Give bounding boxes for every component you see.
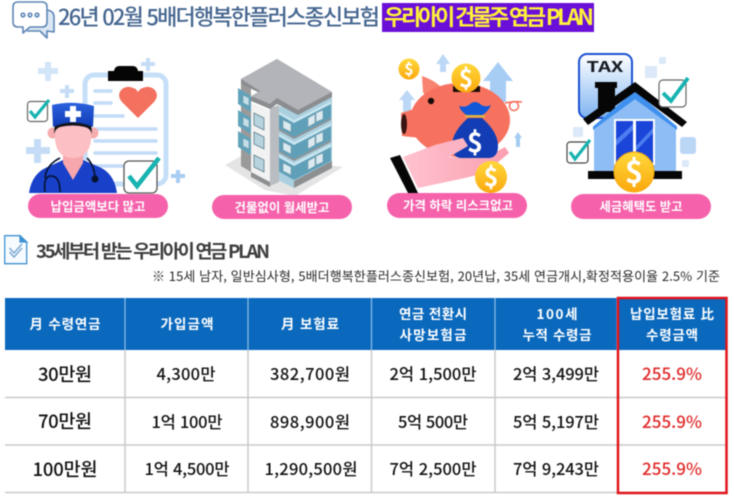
row: 100만원: 7억 2,500만 — [390, 456, 476, 480]
red highlight box — [618, 298, 726, 493]
title: 26년 02월 5배더행복한플러스종신보험 — [58, 0, 380, 32]
row: 100만원: 7억 9,243만 — [513, 456, 599, 480]
stair column — [251, 103, 279, 187]
icon: coins: $ — [459, 59, 473, 94]
row: 100만원: 1억 4,500만 — [144, 456, 230, 480]
row: 70만원: 898,900원 — [270, 409, 350, 433]
icon: decorative plus signs — [26, 58, 185, 183]
house body — [583, 82, 687, 179]
table header — [5, 298, 727, 350]
label pill: 세금혜택도 받고 — [571, 194, 711, 219]
row: 70만원 — [38, 408, 702, 434]
panel: building illustration — [225, 59, 343, 196]
decorative squares — [573, 57, 696, 167]
table header: 月 보험료 — [281, 313, 339, 333]
table header: 사망보험금 — [400, 324, 466, 344]
row: 30만원 — [38, 360, 702, 387]
row: 100만원: 1,290,500원 — [264, 456, 358, 480]
icon: checkbox small — [28, 100, 49, 122]
chimney — [595, 82, 617, 112]
table header: 100세 — [536, 303, 578, 323]
nurse figure — [29, 103, 117, 193]
row: 70만원: 1억 100만 — [152, 409, 222, 433]
label pill: 납입금액보다 많고 — [28, 194, 168, 218]
hand — [390, 138, 509, 193]
section heading: 35세부터 받는 우리아이 연금 PLAN — [36, 238, 270, 264]
label pill: 건물없이 월세받고 — [212, 195, 352, 219]
row: 30만원: 2억 1,500만 — [390, 361, 476, 385]
table header: 가입금액 — [160, 313, 214, 333]
label pill: 건물없이 월세받고: 건물없이 월세받고 — [234, 197, 330, 216]
panel: piggy bank illustration — [390, 54, 522, 194]
table grid lines — [5, 350, 727, 493]
icon: coin: $ — [625, 147, 643, 192]
icon: coins — [398, 56, 507, 194]
label pill: 세금혜택도 받고: 세금혜택도 받고 — [600, 196, 682, 215]
row: 70만원: 70만원 — [38, 408, 92, 434]
row: 100만원: 255.9% — [642, 455, 702, 480]
icon: checkbox left — [567, 140, 590, 163]
icon: coins: $ — [404, 56, 414, 80]
row: 30만원: 30만원 — [38, 361, 92, 387]
table header: 납입보험료 比 — [630, 303, 714, 323]
footnote: ※ 15세 남자, 일반심사형, 5배더행복한플러스종신보험, 20년납, 35세 연금개시,확정적용이율 2.5% 기준 — [152, 266, 720, 285]
arrows — [399, 54, 522, 147]
ground shadow — [225, 154, 343, 196]
row: 30만원: 4,300만 — [156, 361, 216, 385]
icon: checkbox right — [659, 78, 688, 107]
icon: document check — [5, 236, 27, 264]
table header: 연금 전환시 — [399, 303, 467, 323]
table — [5, 298, 727, 493]
icon: coins: $ — [484, 158, 498, 194]
money bag: $ — [467, 121, 483, 160]
piggy body — [401, 76, 522, 157]
clipboard — [85, 66, 166, 184]
row: 30만원: 382,700원 — [270, 361, 350, 385]
icon: checkbox large — [124, 158, 159, 193]
right wing — [278, 97, 332, 188]
panel: nurse illustration — [26, 58, 185, 193]
TAX sign: TAX — [586, 56, 624, 77]
row: 30만원: 2억 3,499만 — [513, 361, 599, 385]
row: 70만원: 5억 500만 — [398, 409, 468, 433]
left wing — [238, 80, 251, 172]
row: 100만원: 100만원 — [32, 456, 98, 482]
row: 100만원 — [32, 455, 702, 482]
table header: 누적 수령금 — [522, 324, 592, 344]
label pill: 가격 하락 리스크없고 — [387, 193, 527, 218]
label pill: 납입금액보다 많고: 납입금액보다 많고 — [50, 196, 146, 215]
icon: speech bubbles — [13, 2, 54, 38]
title highlight: 우리아이 건물주 연금 PLAN — [384, 0, 594, 32]
table header: 月 수령연금 — [30, 313, 100, 333]
row: 30만원: 255.9% — [642, 360, 702, 385]
row: 70만원: 255.9% — [642, 408, 702, 433]
roof — [241, 59, 332, 115]
row: 70만원: 5억 5,197만 — [513, 409, 599, 433]
panel: tax house illustration — [567, 54, 696, 192]
label pill: 가격 하락 리스크없고: 가격 하락 리스크없고 — [403, 195, 513, 214]
table header: 수령금액 — [646, 324, 698, 344]
